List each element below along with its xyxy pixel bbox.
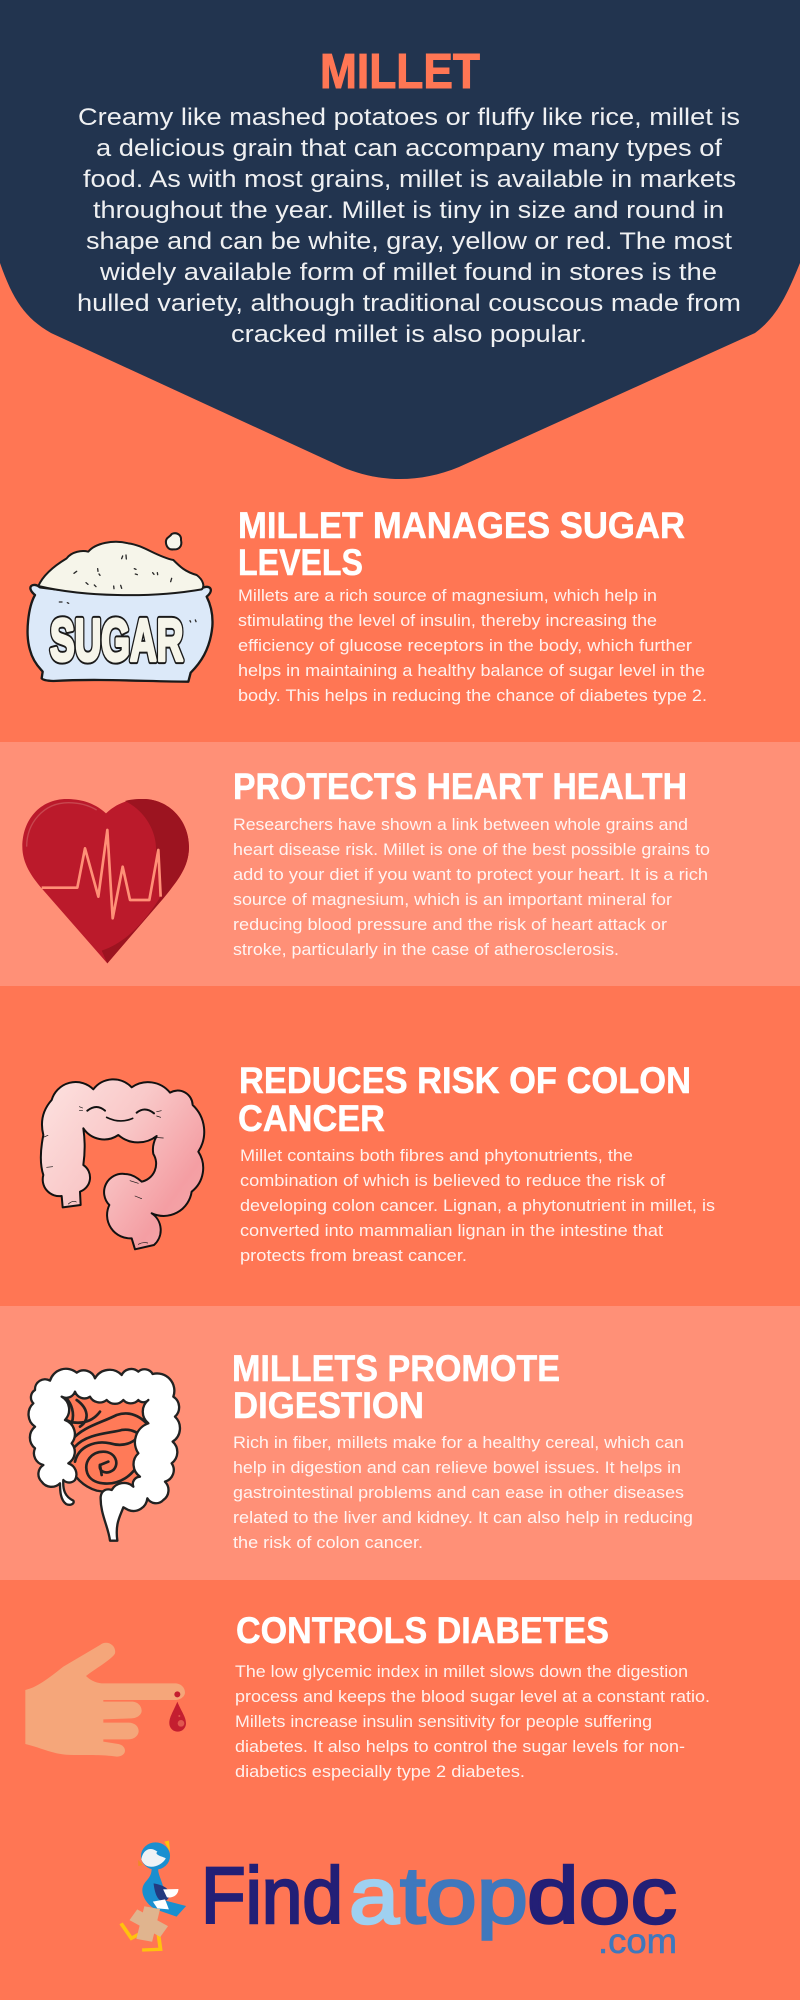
body text: efficiency of glucose receptors in the body, which further — [238, 636, 692, 655]
intro text: widely available form of millet found in stores is the — [99, 259, 717, 286]
body text: converted into mammalian lignan in the intestine that — [240, 1221, 663, 1240]
body text: combination of which is believed to reduce the risk of — [240, 1171, 665, 1190]
intro text: cracked millet is also popular. — [231, 321, 587, 348]
heading — [232, 1348, 560, 1426]
header shape — [0, 0, 800, 479]
body text: protects from breast cancer. — [240, 1246, 467, 1265]
intro text — [77, 104, 741, 348]
body text: diabetics especially type 2 diabetes. — [235, 1762, 525, 1781]
icon: finger with blood drop — [25, 1643, 186, 1757]
heading: MILLET MANAGES SUGAR — [238, 505, 685, 546]
body text: related to the liver and kidney. It can also help in reducing — [233, 1508, 693, 1527]
heading: CONTROLS DIABETES — [236, 1610, 609, 1651]
heading: PROTECTS HEART HEALTH — [233, 766, 687, 807]
heading: MILLETS PROMOTE — [232, 1348, 560, 1389]
panel: header — [0, 0, 800, 479]
intro text: food. As with most grains, millet is available in markets — [83, 166, 736, 193]
icon: sugar bowl — [28, 533, 213, 682]
heading — [238, 505, 685, 583]
body text: the risk of colon cancer. — [233, 1533, 423, 1552]
panel: protects heart health — [0, 742, 800, 986]
intro text: throughout the year. Millet is tiny in size and round in — [93, 197, 724, 224]
body text: Millets increase insulin sensitivity for people suffering — [235, 1712, 652, 1731]
body text: help in digestion and can relieve bowel issues. It helps in — [233, 1458, 681, 1477]
heading: CANCER — [238, 1098, 385, 1139]
icon: intestines — [29, 1369, 180, 1541]
body text: diabetes. It also helps to control the sugar levels for non- — [235, 1737, 685, 1756]
logo wordmark: doc — [527, 1851, 677, 1940]
logo wordmark: a — [349, 1851, 400, 1940]
icon: colon — [41, 1079, 204, 1249]
logo wordmark: Find — [201, 1851, 343, 1940]
logo suffix: .com — [598, 1922, 677, 1961]
panel: promote digestion — [0, 1306, 800, 1580]
icon: bird mascot — [121, 1841, 186, 1950]
intro text: Creamy like mashed potatoes or fluffy like rice, millet is — [78, 104, 740, 131]
body text: developing colon cancer. Lignan, a phytonutrient in millet, is — [240, 1196, 715, 1215]
heading: DIGESTION — [233, 1385, 424, 1426]
body text: gastrointestinal problems and can ease in other diseases — [233, 1483, 684, 1502]
intro text: a delicious grain that can accompany many types of — [96, 135, 722, 162]
heading: REDUCES RISK OF COLON — [239, 1060, 691, 1101]
body text: Rich in fiber, millets make for a healthy cereal, which can — [233, 1433, 684, 1452]
panel: controls diabetes — [25, 1610, 710, 1781]
logo wordmark — [201, 1851, 677, 1940]
intro text: hulled variety, although traditional couscous made from — [77, 290, 741, 317]
band background — [0, 1306, 800, 1580]
body text: source of magnesium, which is an important mineral for — [233, 890, 672, 909]
body text — [233, 1433, 693, 1552]
body text: helps in maintaining a healthy balance of sugar level in the — [238, 661, 705, 680]
heading — [238, 1060, 691, 1139]
body text: body. This helps in reducing the chance of diabetes type 2. — [238, 686, 707, 705]
logo wordmark: top — [400, 1851, 528, 1940]
body text: The low glycemic index in millet slows down the digestion — [235, 1662, 688, 1681]
body text: stimulating the level of insulin, thereby increasing the — [238, 611, 657, 630]
body text: add to your diet if you want to protect your heart. It is a rich — [233, 865, 708, 884]
panel: manages sugar levels — [28, 505, 707, 705]
icon: sugar bowl: SUGAR — [50, 607, 183, 674]
intro text: shape and can be white, gray, yellow or red. The most — [86, 228, 732, 255]
band background — [0, 742, 800, 986]
body text: process and keeps the blood sugar level at a constant ratio. — [235, 1687, 710, 1706]
body text: stroke, particularly in the case of atherosclerosis. — [233, 940, 619, 959]
body text: Millets are a rich source of magnesium, which help in — [238, 586, 657, 605]
logo: Findatopdoc — [121, 1841, 677, 1961]
heading: LEVELS — [238, 542, 363, 583]
body text: heart disease risk. Millet is one of the best possible grains to — [233, 840, 710, 859]
body text — [235, 1662, 710, 1781]
icon: sugar bowl: SUGAR — [50, 607, 183, 674]
body text — [238, 586, 707, 705]
body text — [233, 815, 710, 959]
icon: heart — [22, 799, 189, 963]
body text: Millet contains both fibres and phytonutrients, the — [240, 1146, 633, 1165]
body text: reducing blood pressure and the risk of heart attack or — [233, 915, 667, 934]
body text — [240, 1146, 715, 1265]
title: MILLET — [320, 45, 480, 99]
body text: Researchers have shown a link between whole grains and — [233, 815, 688, 834]
panel: reduces risk of colon cancer — [41, 1060, 715, 1265]
